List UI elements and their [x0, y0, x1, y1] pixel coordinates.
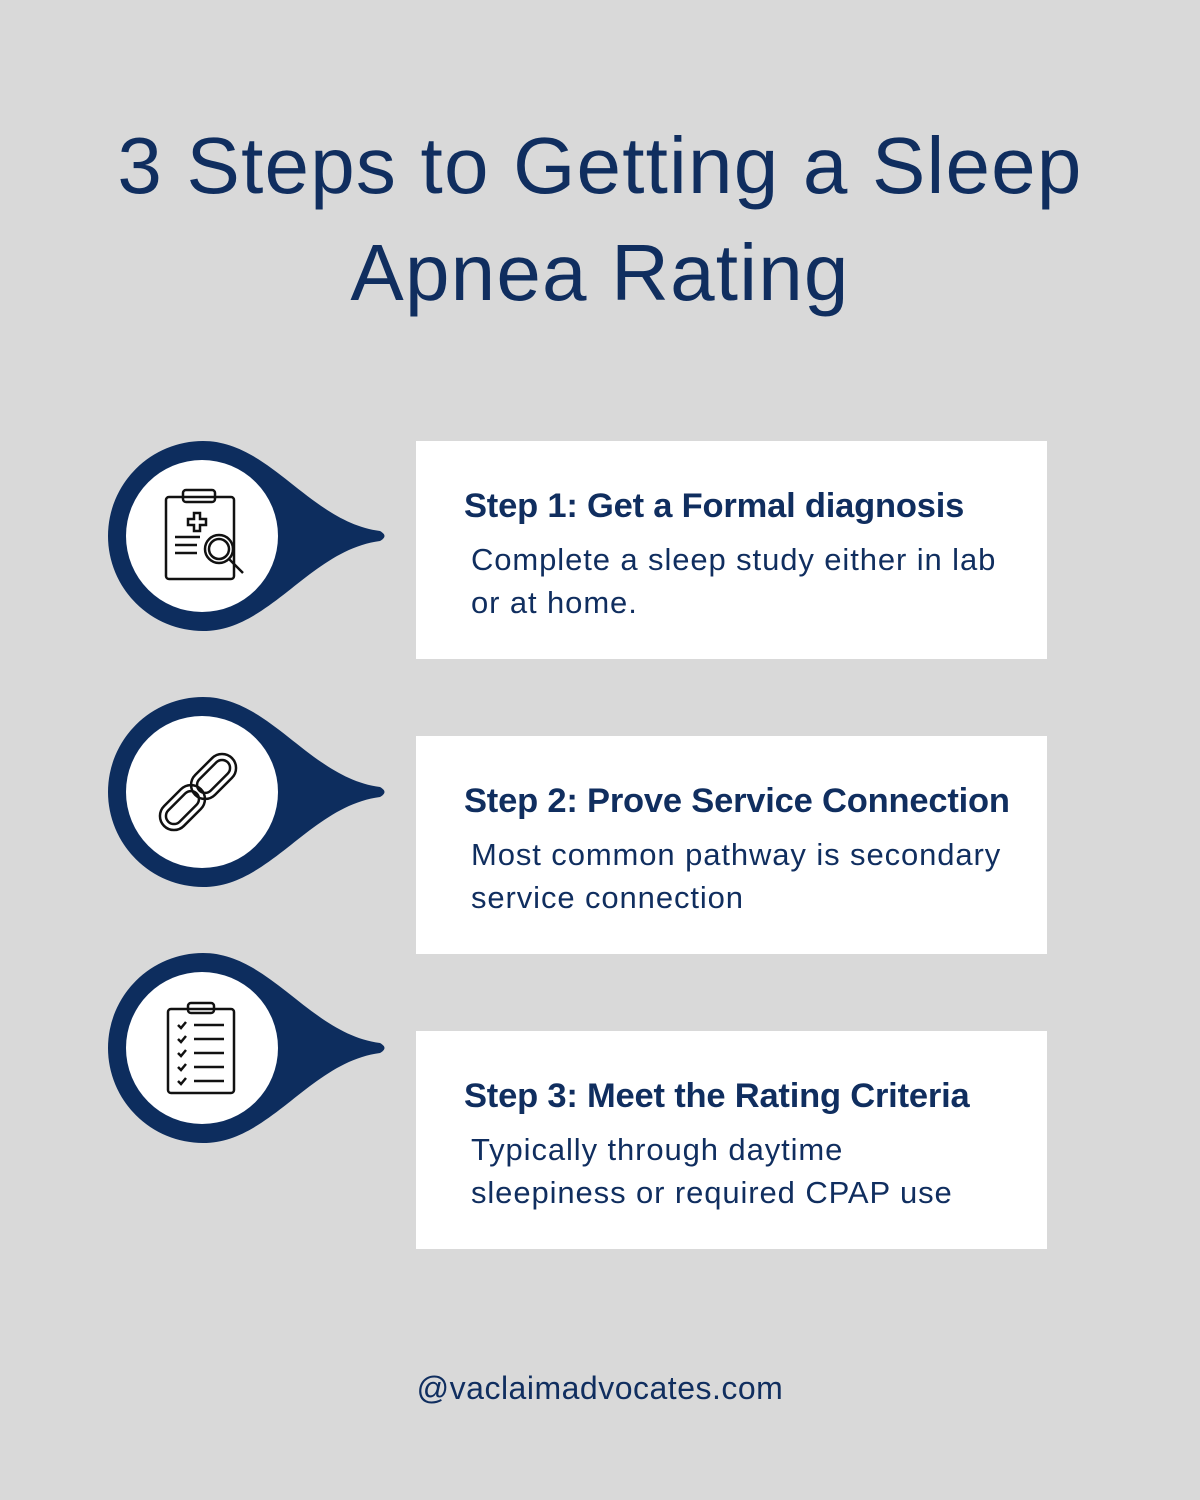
card: step 2: [416, 736, 1047, 954]
title: 3 Steps to Getting a Sleep: [117, 121, 1083, 210]
card: step 3: [416, 1031, 1047, 1249]
pin icon: diagnosis: [108, 441, 384, 631]
pin icon: checklist: [108, 953, 384, 1143]
card: step 3: Typically through daytime: [471, 1132, 843, 1167]
card: step 1: or at home.: [471, 585, 638, 620]
card: step 3: Step 3: Meet the Rating Criteria: [464, 1077, 969, 1115]
card: step 2: Most common pathway is secondary service connection: [471, 837, 1001, 915]
card: step 1: [416, 441, 1047, 659]
card: step 3: sleepiness or required CPAP use: [471, 1175, 953, 1210]
card: step 2: Step 2: Prove Service Connection: [464, 782, 1010, 820]
title: Apnea Rating: [350, 228, 850, 317]
title: [117, 121, 1083, 317]
footer: @vaclaimadvocates.com: [417, 1370, 783, 1406]
pin icon: chain link: [108, 697, 384, 887]
card: step 1: Complete a sleep study either in lab: [471, 542, 996, 577]
card: step 1: Step 1: Get a Formal diagnosis: [464, 487, 964, 525]
